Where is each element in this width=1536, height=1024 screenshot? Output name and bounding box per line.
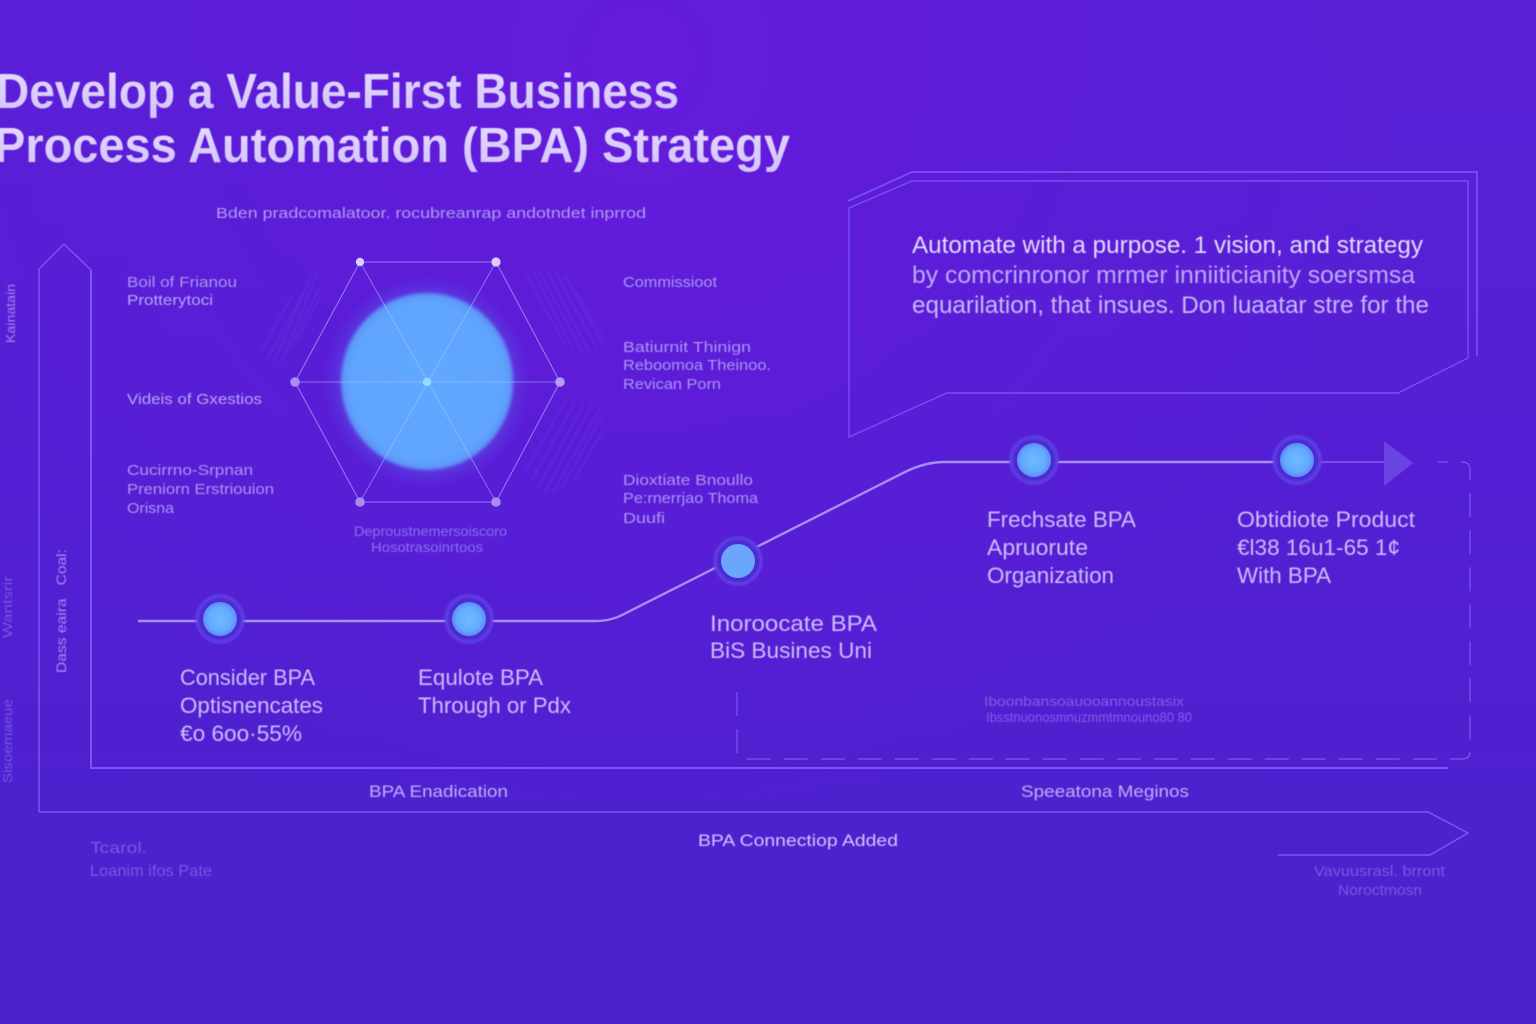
orb: [341, 293, 513, 470]
title: [0, 65, 790, 173]
hexagon frame: [295, 262, 560, 502]
label: middle right: [623, 339, 771, 393]
footnote left: [90, 840, 212, 880]
step 1 label: €o 6oo·55%: [180, 721, 302, 746]
step 5 label: With BPA: [1237, 563, 1331, 588]
label: middle left: Videis of Gxestios: [127, 391, 262, 408]
timeline path: [138, 441, 1413, 621]
timeline line: [138, 462, 1274, 621]
outer arrow outline: [39, 244, 1468, 855]
step 4 label: [987, 507, 1136, 588]
label: bottom left: Orisna: [127, 500, 175, 517]
hexagon vertices: [290, 257, 565, 507]
step 4 label: Organization: [987, 563, 1114, 588]
step 2 label: [418, 665, 571, 718]
step 5 label: [1237, 507, 1415, 588]
inner axis: [91, 270, 1448, 768]
subtitle above hexagon: Bden pradcomalatoor. rocubreanrap andotndet inprrod: [216, 205, 646, 222]
dashed frame caption: [984, 693, 1192, 725]
timeline node 3: [715, 538, 761, 584]
caption under hexagon: Hosotrasoinrtoos: [371, 540, 483, 555]
arrowhead: [1384, 441, 1413, 486]
footnote left: Tcarol.: [90, 840, 147, 857]
label: middle right: Revican Porn: [623, 376, 721, 393]
label: bottom right: Duufi: [623, 510, 665, 527]
callout text: [912, 232, 1429, 319]
left hexagon labels: [127, 274, 274, 517]
label: bottom right: [623, 472, 759, 527]
caption: BPA Enadication: BPA Enadication: [369, 782, 508, 801]
label: top left: Boil of Frianou: [127, 274, 237, 291]
step 1 label: Consider BPA: [180, 665, 315, 690]
outer axis arrow frame: [39, 244, 1468, 855]
label: top left: Protterytoci: [127, 292, 213, 309]
label: bottom right: Pe:rnerrjao Thoma: [623, 490, 759, 507]
axis label: lower left: Wantsrir: [0, 575, 15, 638]
label: middle right: Batiurnit Thinign: [623, 339, 751, 356]
step labels: [180, 507, 1415, 746]
caption under hexagon: [354, 524, 507, 555]
footnote right: Noroctmosn: [1338, 882, 1422, 899]
footnote right: [1314, 863, 1446, 899]
dashed frame caption: Ibsstnuonosmnuzmmtmnouno80 80: [986, 709, 1192, 725]
orb glow: [323, 275, 531, 489]
central orb and hexagon: [290, 257, 565, 507]
timeline node 5: [1274, 437, 1320, 483]
step 4 label: Frechsate BPA: [987, 507, 1136, 532]
hexagon spokes: [295, 262, 560, 502]
step 3 label: BiS Busines Uni: [710, 638, 872, 663]
axis captions: [369, 782, 1189, 850]
step 5 label: €l38 16u1-65 1¢: [1237, 535, 1400, 560]
hatching behind hexagon: [262, 272, 604, 492]
step 1 label: [180, 665, 323, 746]
label: bottom left: [127, 462, 274, 517]
axis label: top: Kainatain: [3, 284, 18, 343]
label: bottom right: Dioxtiate Bnoullo: [623, 472, 753, 489]
footnote right: Vavuusrasl. brront: [1314, 863, 1446, 880]
callout outer frame: [848, 172, 1477, 356]
callout inner frame: [849, 181, 1468, 437]
timeline node 4: [1011, 437, 1057, 483]
right hexagon labels: [623, 274, 771, 527]
timeline node 2: [446, 596, 492, 642]
title: Process Automation (BPA) Strategy: [0, 119, 790, 173]
caption: BPA Connection Added: BPA Connectiop Added: [698, 831, 898, 850]
label: middle right: Reboomoa Theinoo.: [623, 357, 771, 374]
label: bottom left: Cucirrno-Srpnan: [127, 462, 253, 479]
timeline node 1: [197, 596, 243, 642]
callout text: Automate with a purpose. 1 vision, and strategy: [912, 232, 1423, 259]
callout text: equarilation, that insues. Don luaatar stre for the: [912, 292, 1429, 319]
label: top right: Commissioot: [623, 274, 718, 291]
dashed frame caption: Iboonbansoauooannoustasix: [984, 693, 1184, 709]
vertical axis labels: [0, 284, 69, 783]
title: Develop a Value-First Business: [0, 65, 679, 119]
step 5 label: Obtidiote Product: [1237, 507, 1415, 532]
step 2 label: Through or Pdx: [418, 693, 571, 718]
footnote left: Loanim ifos Pate: [90, 863, 212, 880]
timeline line tail: [1318, 461, 1384, 463]
step 4 label: Apruorute: [987, 535, 1088, 560]
step 3 label: Inoroocate BPA: [710, 611, 877, 636]
axis label: bottom left: Sisoemaeue: [0, 699, 15, 783]
label: top left: [127, 274, 237, 309]
caption under hexagon: Deproustnemersoiscoro: [354, 524, 507, 539]
dashed outcome frame: [737, 462, 1470, 759]
step 1 label: Optisnencates: [180, 693, 323, 718]
step 2 label: Equlote BPA: [418, 665, 543, 690]
step 3 label: [710, 611, 877, 663]
callout text: by comcrinronor mrmer inniiticianity soersmsa: [912, 262, 1416, 289]
label: bottom left: Preniorn Erstriouion: [127, 481, 274, 498]
callout panel: [848, 172, 1477, 437]
caption: Speeatona Meginos: Speeatona Meginos: [1021, 782, 1189, 801]
axis label: middle: Dass eaira Coal:: [53, 549, 69, 673]
